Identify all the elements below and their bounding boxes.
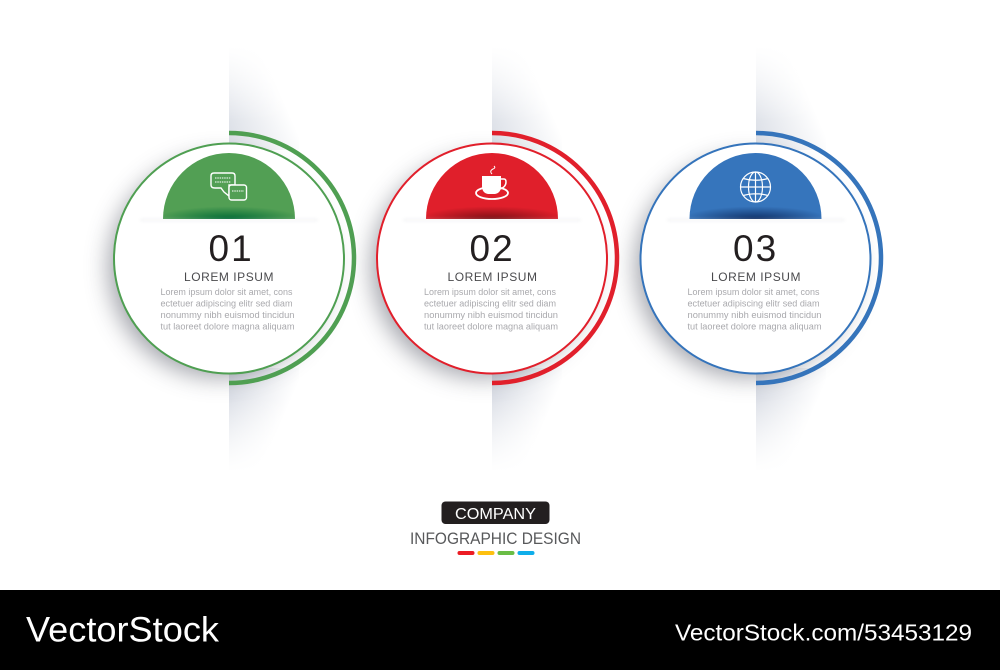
body text: [160, 287, 294, 332]
circle shadow: [636, 157, 856, 377]
subtitle: INFOGRAPHIC DESIGN: [410, 529, 581, 548]
footer url: VectorStock.com/53453129: [675, 620, 972, 646]
outer arc: [229, 133, 354, 383]
number: 03: [733, 228, 778, 269]
main circle: [640, 144, 870, 374]
number: 02: [470, 228, 515, 269]
shadow wedge bottom: [756, 368, 826, 472]
body text: nonummy nibh euismod tincidun: [160, 310, 294, 320]
company badge: [442, 502, 550, 524]
icon: chat bubbles: [211, 173, 246, 200]
shadow wedge top: [229, 46, 299, 150]
shadow wedge top: [756, 46, 826, 150]
main circle: [114, 144, 344, 374]
semicircle tab: [163, 153, 295, 219]
panel: step 01: [109, 46, 354, 472]
tab edge shadow: [140, 219, 318, 221]
number: 01: [208, 228, 254, 269]
semicircle tab: [690, 153, 822, 219]
circle shadow: [109, 157, 329, 377]
body text: ectetuer adipiscing elitr sed diam: [160, 298, 292, 308]
main circle: [377, 144, 607, 374]
shadow wedge bottom: [492, 368, 562, 472]
tab edge shadow: [403, 219, 581, 221]
footer bar: [0, 590, 1000, 670]
body text: tut laoreet dolore magna aliquam: [424, 322, 558, 332]
body text: nonummy nibh euismod tincidun: [688, 310, 822, 320]
tab edge shadow: [667, 219, 845, 221]
panel: step 03: [636, 46, 881, 472]
panel: step 02: [372, 46, 617, 472]
body text: ectetuer adipiscing elitr sed diam: [424, 298, 556, 308]
semicircle tab: [426, 153, 558, 219]
icon: coffee cup: [476, 166, 508, 199]
outer arc: [756, 133, 881, 383]
company badge: COMPANY: [455, 506, 536, 523]
body text: [424, 287, 558, 332]
body text: Lorem ipsum dolor sit amet, cons: [160, 287, 293, 297]
body text: ectetuer adipiscing elitr sed diam: [688, 298, 820, 308]
icon: globe: [740, 172, 770, 202]
subheading: LOREM IPSUM: [448, 270, 537, 284]
body text: Lorem ipsum dolor sit amet, cons: [424, 287, 556, 297]
footer logo: VectorStock: [26, 610, 220, 650]
circle shadow: [372, 157, 592, 377]
outer arc: [492, 133, 617, 383]
body text: tut laoreet dolore magna aliquam: [688, 322, 822, 332]
subheading: LOREM IPSUM: [711, 270, 800, 284]
shadow wedge bottom: [229, 368, 299, 472]
body text: nonummy nibh euismod tincidun: [424, 310, 558, 320]
shadow wedge top: [492, 46, 562, 150]
subheading: LOREM IPSUM: [184, 270, 274, 284]
body text: Lorem ipsum dolor sit amet, cons: [688, 287, 820, 297]
colour legend dashes: [458, 551, 534, 555]
body text: tut laoreet dolore magna aliquam: [160, 322, 294, 332]
body text: [688, 287, 822, 332]
